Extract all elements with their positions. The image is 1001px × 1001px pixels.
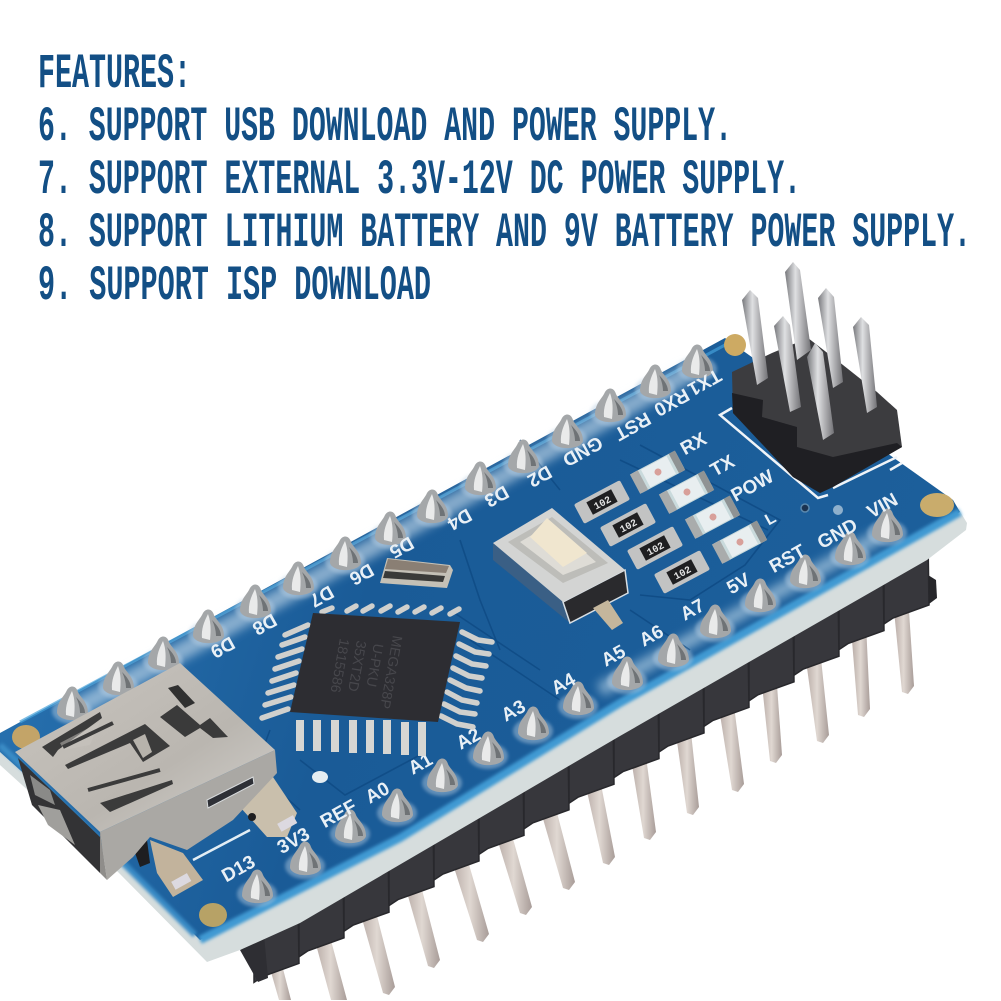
crystal — [380, 558, 453, 588]
lower row pin labels: A6 — [636, 621, 667, 651]
upper row pin labels: GND — [559, 431, 606, 470]
resistors: 102 — [673, 565, 694, 583]
circuit board — [0, 334, 967, 962]
lower pin header: legs — [269, 596, 914, 1000]
upper row pin labels — [207, 364, 725, 662]
upper row pin labels: D6 — [346, 559, 377, 589]
lower row solder pins — [237, 508, 907, 907]
resistors: 102 — [593, 495, 614, 513]
lower row pin labels: A1 — [405, 749, 437, 779]
LED labels: POW — [728, 466, 778, 506]
upper row pin labels: TX1 — [684, 364, 725, 400]
upper row solder pins — [52, 344, 717, 724]
lower row pin labels — [218, 489, 902, 887]
LED labels: RX — [677, 429, 711, 460]
upper row pin labels: RST — [610, 407, 654, 444]
mini USB connector — [15, 663, 297, 897]
microcontroller chip: MEGA328P — [377, 634, 406, 710]
heading: features list: 9. SUPPORT ISP DOWNLOAD — [38, 258, 431, 314]
resistors: 102 — [619, 518, 640, 536]
lower row pin labels: A0 — [362, 778, 393, 808]
LED labels — [677, 429, 779, 529]
lower row pin labels: A7 — [677, 595, 708, 625]
LED labels: TX — [707, 451, 739, 481]
lower row pin labels: REF — [317, 796, 360, 833]
reset button — [493, 508, 628, 630]
upper row pin labels: RX0 — [650, 384, 693, 420]
microcontroller chip: 1815586 — [328, 637, 353, 694]
resistors — [574, 480, 710, 594]
lower row pin labels: VIN — [864, 489, 902, 523]
lower row pin labels: 5V — [723, 569, 754, 599]
lower row pin labels: RST — [766, 541, 810, 578]
resistors: 102 — [646, 541, 667, 559]
microcontroller chip — [262, 606, 492, 756]
upper row pin labels: D7 — [306, 581, 337, 611]
lower row pin labels: A4 — [548, 669, 580, 699]
upper row pin labels: D9 — [207, 632, 238, 662]
lower row pin labels: GND — [814, 515, 861, 554]
ICSP header — [720, 262, 902, 498]
heading: features list — [38, 46, 971, 314]
lower row pin labels: D13 — [218, 852, 259, 887]
upper row pin labels: D8 — [249, 609, 280, 639]
lower pin header: black housings — [240, 540, 937, 982]
lower row pin labels: A3 — [498, 696, 529, 726]
heading: features list: FEATURES: — [38, 46, 191, 102]
lower row pin labels: A5 — [598, 641, 630, 671]
status LEDs — [630, 451, 767, 564]
microcontroller chip: U-PKU — [363, 642, 387, 688]
lower row pin labels: 3V3 — [274, 824, 314, 859]
microcontroller chip: 35XT2D — [345, 639, 370, 693]
upper row pin labels: D2 — [524, 461, 555, 491]
lower row pin labels: A2 — [453, 724, 484, 754]
LED labels: L — [762, 509, 779, 529]
upper row pin labels: D4 — [443, 504, 475, 534]
upper row pin labels: D3 — [481, 481, 512, 511]
upper row pin labels: D5 — [385, 532, 417, 562]
